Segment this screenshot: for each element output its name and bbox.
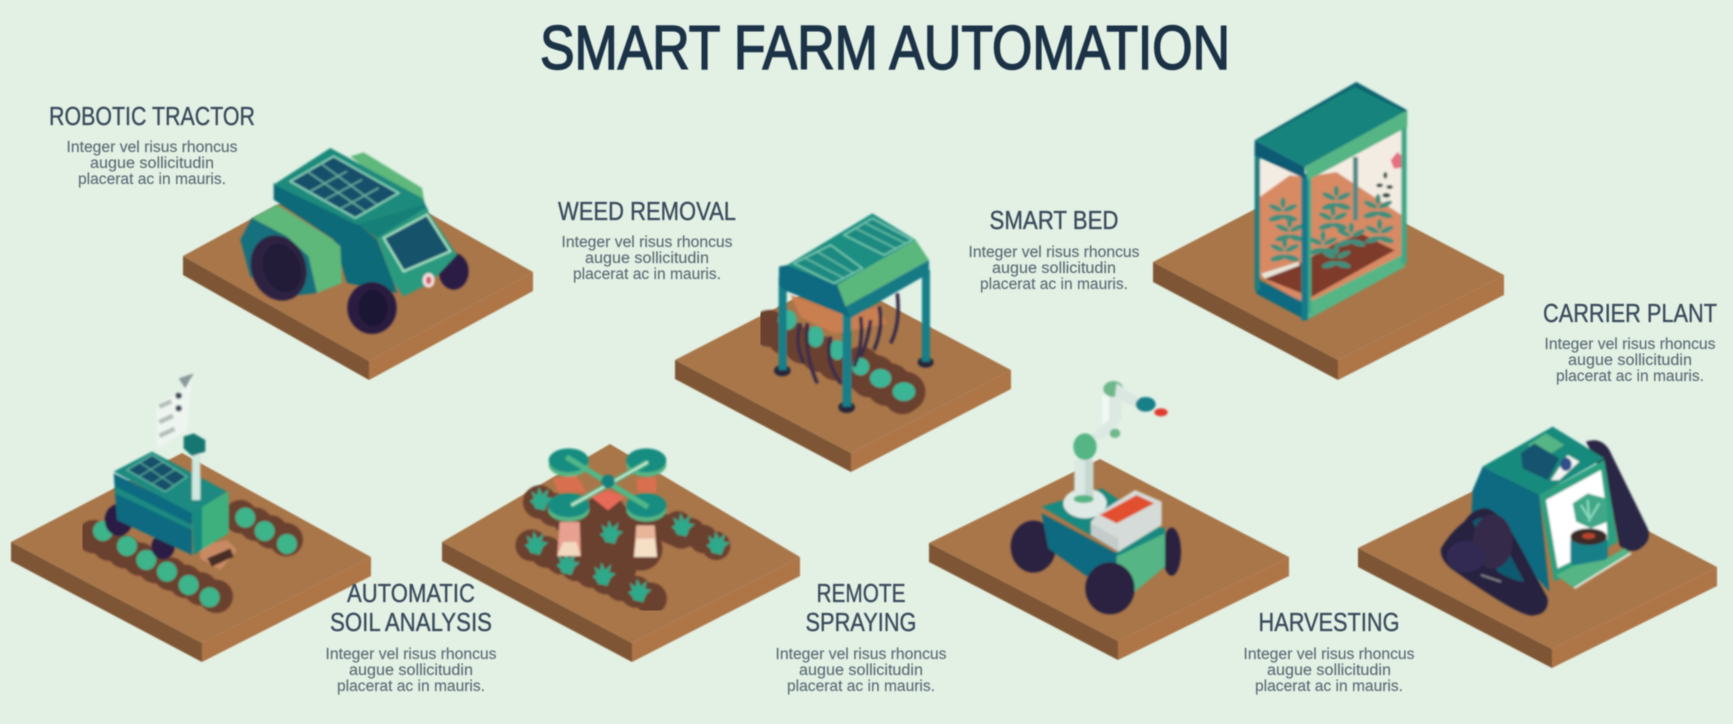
description: placerat ac in mauris. [980,276,1128,293]
description: augue sollicitudin [90,155,214,172]
description: placerat ac in mauris. [337,678,485,695]
heading: REMOTE [816,578,906,608]
heading [330,578,492,637]
icon: robotic tractor [240,148,469,334]
icon: plant carrier robot [1441,427,1649,616]
description: placerat ac in mauris. [1255,678,1403,695]
icon: smart bed cabinet [1255,82,1407,320]
platform: harvesting [929,459,1289,660]
description [562,234,733,283]
platform: automatic soil analysis [11,453,371,662]
description [1544,336,1716,385]
description [776,646,947,695]
heading: SOIL ANALYSIS [330,607,492,637]
description: placerat ac in mauris. [1556,368,1704,385]
platform: weed removal [675,277,1011,472]
description: placerat ac in mauris. [573,266,721,283]
description: Integer vel risus rhoncus [968,244,1140,261]
panel: robotic tractor [49,101,533,380]
icon: harvesting robot [1011,381,1181,614]
description [968,244,1140,293]
heading: SMART BED [990,205,1118,235]
description: placerat ac in mauris. [787,678,935,695]
heading: AUTOMATIC [347,578,475,608]
heading: WEED REMOVAL [558,196,736,226]
description [66,139,238,188]
icon: spraying drone [525,448,730,602]
platform: smart bed [1153,177,1504,380]
icon: weed removal machine [769,213,934,413]
description: Integer vel risus rhoncus [326,646,497,663]
description: augue sollicitudin [585,250,709,267]
panel: automatic soil analysis [11,373,497,695]
description: Integer vel risus rhoncus [1244,646,1415,663]
icon: soil analysis robot [93,373,300,607]
description: augue sollicitudin [1267,662,1391,679]
description [1244,646,1415,695]
description: Integer vel risus rhoncus [562,234,733,251]
platform: robotic tractor [183,167,533,380]
heading [806,578,916,637]
panel: smart bed [968,82,1504,380]
panel: carrier plant [1358,298,1717,668]
panel: harvesting [929,381,1415,695]
description [326,646,497,695]
description: augue sollicitudin [1568,352,1692,369]
platform: remote spraying [442,444,800,662]
description: augue sollicitudin [799,662,923,679]
description: placerat ac in mauris. [78,171,226,188]
heading: SPRAYING [806,607,916,637]
title: SMART FARM AUTOMATION [540,14,1230,83]
description: augue sollicitudin [349,662,473,679]
heading: ROBOTIC TRACTOR [49,101,255,131]
panel: remote spraying [442,444,947,695]
description: augue sollicitudin [992,260,1116,277]
description: Integer vel risus rhoncus [776,646,947,663]
platform: carrier plant [1358,466,1717,668]
panel: weed removal [558,196,1011,472]
description: Integer vel risus rhoncus [1544,336,1716,353]
heading: HARVESTING [1258,607,1400,637]
description: Integer vel risus rhoncus [66,139,238,156]
